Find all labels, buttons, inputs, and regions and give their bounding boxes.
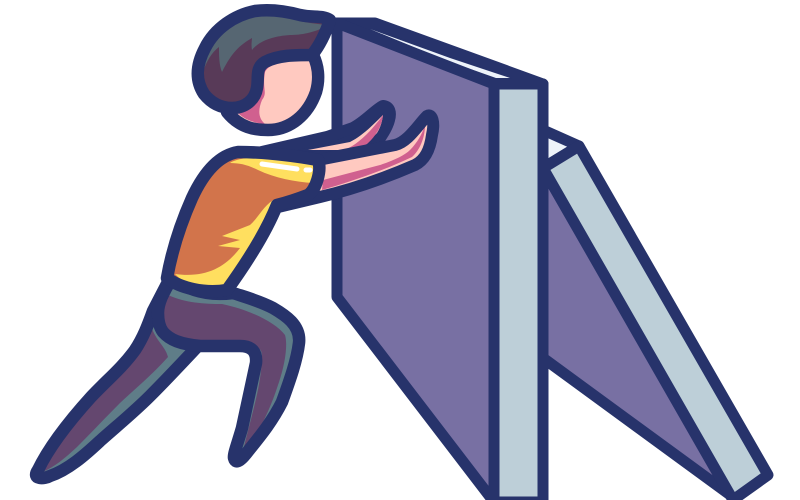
face [227,55,318,130]
back leg [36,282,196,478]
front panel top face [337,23,543,84]
back panel edge [543,146,768,500]
torso outline [167,152,319,291]
person [36,10,433,478]
sleeve gloss [262,164,310,170]
back panel purple face [543,168,733,497]
back arm [262,106,390,158]
front arm [278,115,433,207]
back panel [543,130,768,500]
front panel side edge [494,84,543,500]
shirt yellow highlights [230,157,316,183]
front leg [158,278,299,461]
top face highlight [370,29,510,78]
front panel [337,23,543,500]
front panel purple face [337,23,494,500]
torso with sleeve [167,152,319,291]
hair [198,10,330,108]
back panel top face [543,130,579,168]
